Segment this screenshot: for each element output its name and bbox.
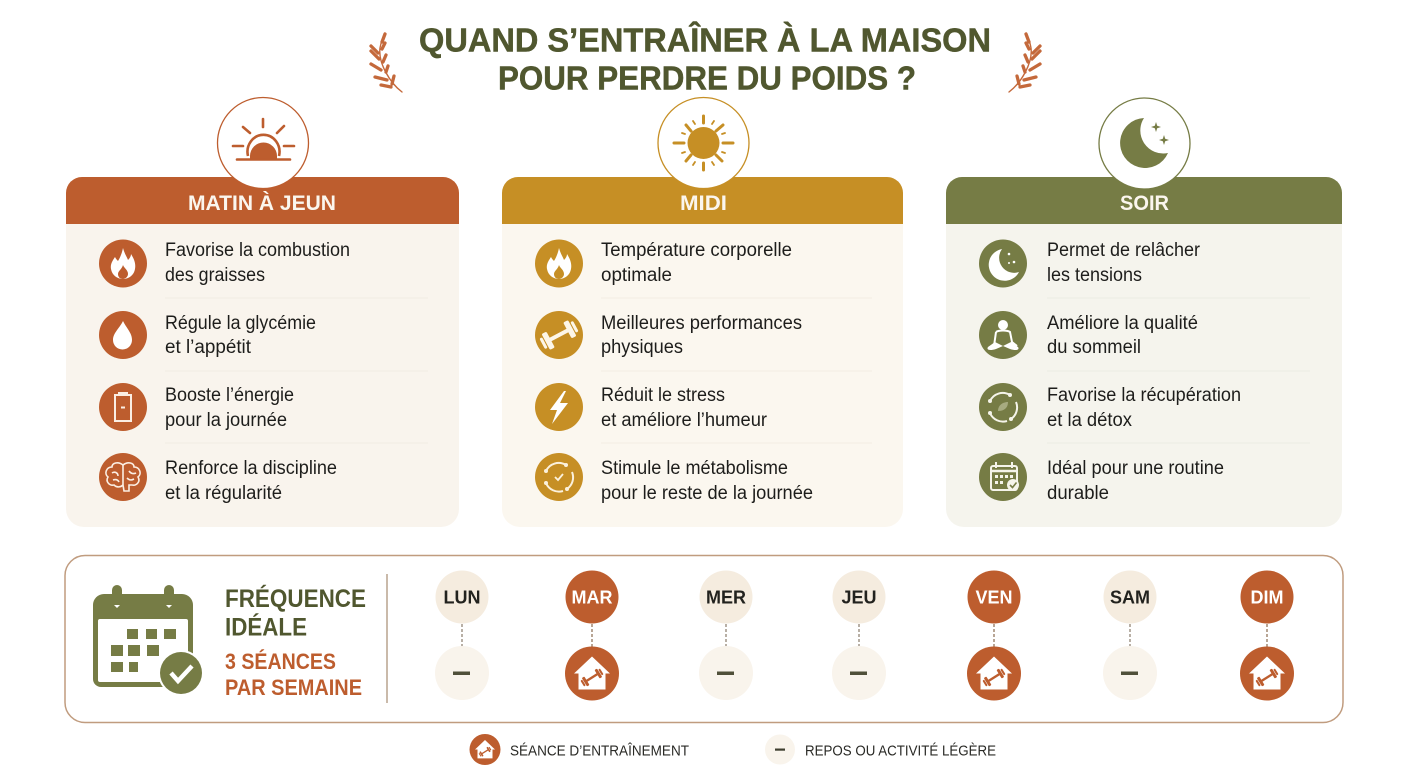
panel header: SOIR [1120,191,1169,215]
row: discipline: et la régularité [165,483,282,504]
day: dimanche [1240,570,1294,700]
row: routine: durable [1047,483,1109,504]
row: discipline [99,453,337,504]
row: combustion: Favorise la combustion [165,240,350,261]
panel: fréquence idéale [65,556,1343,722]
row: tensions: Permet de relâcher [1047,240,1201,261]
panel: soir [946,98,1342,527]
row: tensions: les tensions [1047,265,1142,286]
title: POUR PERDRE DU POIDS ? [498,60,916,98]
panel body [66,215,459,527]
icon: sunrise [218,98,308,188]
legend: séance d'entraînement [470,734,689,765]
panel header [946,177,1342,224]
day: mercredi: MER [706,588,746,608]
title [419,22,991,98]
panel: matin à jeun [66,98,459,527]
day: samedi: SAM [1110,588,1150,608]
row: température: optimale [601,265,672,286]
row: température [535,240,792,288]
row: énergie: pour la journée [165,410,287,431]
row: récupération: Favorise la récupération [1047,385,1241,406]
heading: fréquence idéale: FRÉQUENCE [225,584,366,613]
panel body [946,215,1342,527]
row: performances [535,311,802,359]
row: performances: physiques [601,337,683,358]
day: dimanche: DIM [1250,588,1284,608]
row: énergie: Booste l’énergie [165,385,294,406]
row: stress: Réduit le stress [601,385,725,406]
day: mardi [565,570,619,700]
row: combustion [99,240,350,288]
row: combustion: des graisses [165,265,265,286]
row: température: Température corporelle [601,240,792,261]
icon: sun [658,98,749,188]
day: lundi: LUN [444,588,480,608]
row: récupération [979,383,1241,431]
title: QUAND S’ENTRAÎNER À LA MAISON [419,22,991,60]
day: jeudi [832,570,886,700]
icon: calendar with check [93,585,204,696]
row: sommeil [979,311,1198,359]
panel: midi [502,98,903,527]
heading: fréquence idéale: 3 SÉANCES [225,649,336,674]
panel header: MIDI [680,191,727,215]
row: sommeil: Améliore la qualité [1047,313,1198,334]
row: métabolisme [535,453,813,504]
icon: left laurel [371,33,402,92]
row: routine: Idéal pour une routine [1047,458,1224,479]
panel body [502,215,903,527]
day: jeudi: JEU [841,588,877,608]
heading: fréquence idéale: PAR SEMAINE [225,675,362,700]
icon: right laurel [1009,33,1040,92]
row: stress [535,383,768,431]
day: lundi [435,570,489,700]
panel header: MATIN À JEUN [188,190,336,215]
panel header [66,177,459,224]
row: routine [979,453,1224,504]
heading: fréquence idéale [225,584,366,700]
row: stress: et améliore l’humeur [601,410,768,431]
legend: séance d'entraînement: SÉANCE D’ENTRAÎNEMENT [510,742,689,760]
row: glycémie [99,311,316,359]
icon: moon [1099,98,1190,189]
row: performances: Meilleures performances [601,313,802,334]
day: vendredi: VEN [975,588,1013,608]
row: métabolisme: pour le reste de la journée [601,483,813,504]
row: sommeil: du sommeil [1047,337,1141,358]
day: mardi: MAR [572,588,612,608]
legend: repos ou activité légère [765,734,996,764]
day: mercredi [699,570,753,700]
day: samedi [1103,570,1157,700]
panel header [502,177,903,224]
row: énergie [99,383,294,431]
row: glycémie: et l’appétit [165,337,252,358]
legend: repos ou activité légère: REPOS OU ACTIVITÉ LÉGÈRE [805,742,996,760]
heading: fréquence idéale: IDÉALE [225,612,307,642]
row: glycémie: Régule la glycémie [165,313,316,334]
row: discipline: Renforce la discipline [165,458,337,479]
day: vendredi [967,570,1021,700]
row: récupération: et la détox [1047,410,1132,431]
row: tensions [979,240,1201,288]
row: métabolisme: Stimule le métabolisme [601,458,788,479]
